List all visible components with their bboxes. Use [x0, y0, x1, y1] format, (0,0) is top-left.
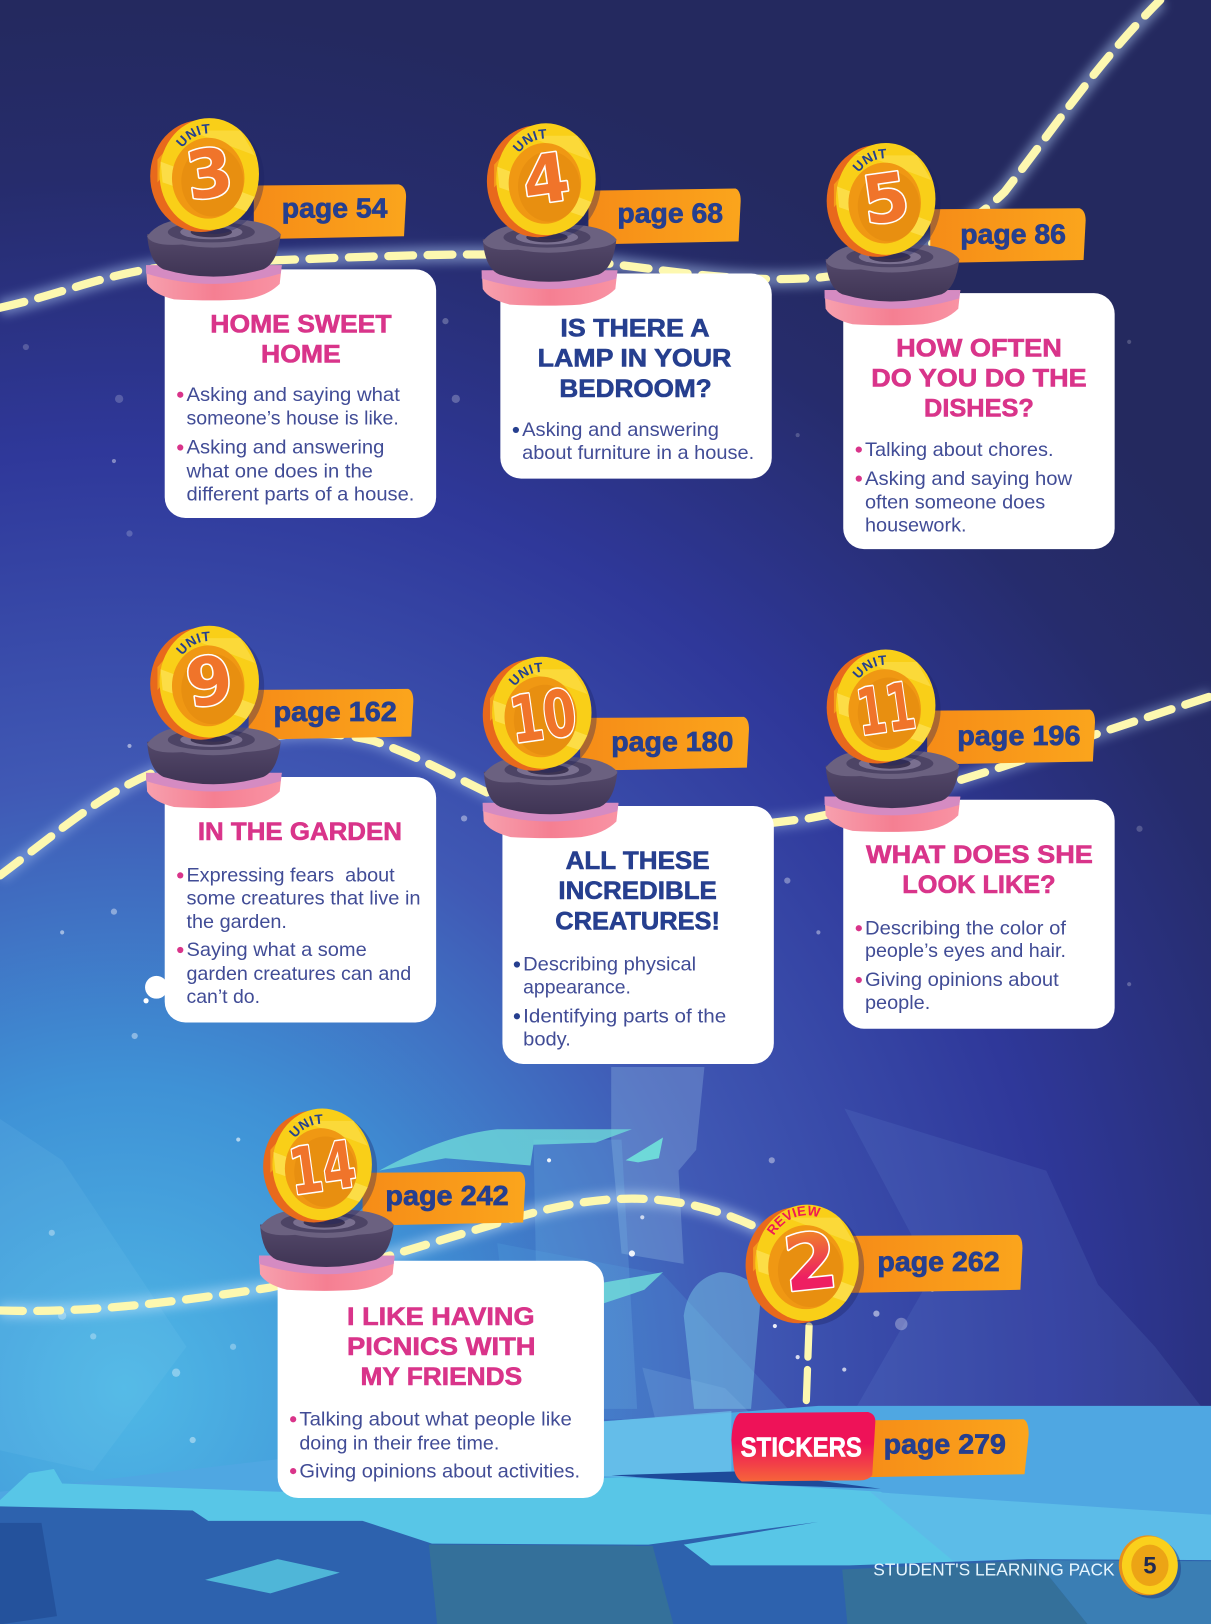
coin unit 3 — [150, 118, 264, 234]
unit 14 panel — [259, 1108, 604, 1498]
card: lamp: LAMP IN YOUR — [538, 345, 731, 373]
page tag 196 — [927, 710, 1095, 765]
page number coin — [1119, 1535, 1181, 1599]
coin review 2: 2 — [779, 1216, 842, 1310]
coin unit 10: UNIT — [508, 662, 542, 685]
ice floor — [0, 1406, 1211, 1624]
coin unit 4 — [486, 123, 600, 239]
page tag 54: page 54 — [282, 193, 388, 224]
page tag 68 — [588, 189, 741, 244]
coin unit 10: 10 — [505, 675, 581, 759]
stickers — [731, 1412, 1029, 1481]
coin unit 5: 5 — [858, 157, 914, 241]
page tag 262 — [849, 1235, 1022, 1293]
pedestal — [825, 243, 960, 325]
card: picnics — [278, 1261, 604, 1498]
card: in the garden: garden creatures can and — [186, 963, 411, 985]
card: lamp — [500, 273, 772, 479]
page number coin: 5 — [1143, 1553, 1157, 1580]
pedestal — [259, 1209, 395, 1291]
card: incredible creatures: Identifying parts of the — [523, 1006, 726, 1028]
card: chores — [843, 293, 1115, 549]
coin unit 14: UNIT — [288, 1114, 322, 1136]
page tag 162 — [249, 689, 413, 740]
stickers badge: STICKERS — [741, 1432, 862, 1463]
page tag 279 — [860, 1419, 1029, 1477]
card: what does she look like: people’s eyes and hair. — [865, 940, 1066, 962]
card: picnics: Giving opinions about activities. — [299, 1460, 580, 1482]
card: chores: Asking and saying how — [865, 468, 1073, 490]
card: what does she look like — [843, 800, 1115, 1029]
coin unit 3: 3 — [181, 132, 238, 216]
coin unit 11 — [826, 650, 941, 766]
card: in the garden: some creatures that live in — [186, 887, 421, 909]
card: home sweet home: different parts of a house. — [186, 483, 414, 505]
coin unit 5: UNIT — [852, 148, 886, 171]
card: incredible creatures: ALL THESE — [566, 847, 710, 875]
coin unit 9 — [150, 626, 264, 742]
coin unit 5 — [826, 143, 940, 259]
coin unit 14: 14 — [284, 1127, 361, 1211]
card: in the garden: IN THE GARDEN — [198, 818, 402, 846]
page tag 242: page 242 — [385, 1180, 509, 1211]
card: lamp: BEDROOM? — [559, 375, 712, 403]
coin unit 10 — [482, 656, 597, 772]
page tag 86: page 86 — [960, 218, 1066, 249]
stars — [23, 318, 1143, 1443]
card: chores: HOW OFTEN — [896, 334, 1062, 362]
card: home sweet home: HOME — [261, 341, 341, 369]
unit 4 panel — [482, 123, 772, 479]
page tag 196: page 196 — [957, 720, 1080, 751]
card: in the garden: the garden. — [186, 911, 287, 933]
card: picnics: MY FRIENDS — [361, 1363, 522, 1391]
page tag 180: page 180 — [611, 726, 733, 757]
card: picnics: doing in their free time. — [299, 1432, 499, 1454]
pedestal — [146, 726, 282, 808]
page tag 162: page 162 — [273, 696, 397, 727]
review 2 — [746, 1204, 1022, 1326]
pedestal — [146, 219, 282, 300]
card: what does she look like: LOOK LIKE? — [902, 871, 1056, 899]
card: what does she look like: Describing the color of — [865, 917, 1067, 939]
card: incredible creatures: INCREDIBLE — [558, 877, 717, 905]
unit 10 panel — [482, 656, 774, 1064]
card: chores: Talking about chores. — [865, 439, 1054, 461]
card: what does she look like: WHAT DOES SHE — [866, 841, 1093, 869]
card: picnics: I LIKE HAVING — [347, 1303, 535, 1331]
card: lamp: Asking and answering — [522, 419, 719, 441]
card: home sweet home: Asking and saying what — [186, 384, 400, 406]
page tag 86 — [930, 208, 1086, 263]
dashed path: middle — [0, 696, 1211, 875]
unit 3 panel — [146, 118, 436, 518]
card: in the garden: Expressing fears about — [186, 865, 395, 887]
coin unit 9: 9 — [181, 640, 238, 723]
coin unit 14 — [263, 1108, 377, 1224]
stickers badge — [731, 1412, 875, 1481]
coin unit 4: 4 — [518, 137, 574, 221]
coin unit 3: UNIT — [176, 124, 210, 146]
unit 9 panel — [143, 626, 436, 1022]
dashed path: top — [0, 0, 1160, 308]
card: in the garden: can’t do. — [186, 986, 260, 1008]
decorative bubble — [143, 976, 168, 1003]
coin unit 9: UNIT — [176, 632, 210, 654]
card: home sweet home: what one does in the — [185, 461, 373, 483]
page tag 242 — [363, 1172, 525, 1226]
coin unit 11: 11 — [852, 669, 920, 751]
card: what does she look like: people. — [865, 992, 930, 1014]
card: incredible creatures: appearance. — [523, 977, 631, 999]
unit 5 panel — [824, 143, 1115, 550]
dashed path: bottom — [0, 1199, 809, 1411]
card: chores: DO YOU DO THE — [871, 364, 1087, 392]
footer label: STUDENT'S LEARNING PACK — [873, 1560, 1115, 1580]
coin review 2 — [746, 1204, 864, 1326]
pedestal — [483, 756, 618, 838]
card: home sweet home: Asking and answering — [186, 437, 384, 459]
card: in the garden: Saying what a some — [186, 939, 367, 961]
card: chores: often someone does — [865, 492, 1045, 514]
card: lamp: IS THERE A — [560, 315, 710, 343]
pedestal — [825, 750, 960, 832]
footer — [873, 1535, 1181, 1599]
ice scenery — [0, 1067, 1211, 1471]
coin review 2: REVIEW — [766, 1206, 821, 1235]
card: what does she look like: Giving opinions about — [865, 969, 1059, 991]
card: in the garden — [165, 777, 436, 1023]
card: home sweet home: HOME SWEET — [210, 311, 392, 339]
page tag 68: page 68 — [617, 198, 723, 229]
card: incredible creatures: body. — [523, 1028, 571, 1050]
card: picnics: Talking about what people like — [299, 1409, 572, 1431]
card: incredible creatures: CREATURES! — [555, 907, 720, 935]
card: lamp: about furniture in a house. — [522, 442, 754, 464]
coin unit 4: UNIT — [512, 129, 546, 152]
page tag 279: page 279 — [884, 1428, 1006, 1459]
card: incredible creatures — [502, 806, 774, 1064]
coin unit 11: UNIT — [852, 655, 886, 678]
card: chores: DISHES? — [924, 394, 1034, 422]
page tag 54 — [254, 184, 406, 239]
page tag 262: page 262 — [877, 1246, 1000, 1277]
card: home sweet home — [165, 269, 436, 518]
card: picnics: PICNICS WITH — [347, 1333, 536, 1361]
card: incredible creatures: Describing physical — [523, 954, 696, 976]
pedestal — [482, 224, 617, 306]
card: chores: housework. — [865, 514, 967, 536]
page tag 180 — [580, 717, 749, 771]
card: home sweet home: someone’s house is like. — [186, 408, 399, 430]
unit 11 panel — [824, 650, 1115, 1029]
